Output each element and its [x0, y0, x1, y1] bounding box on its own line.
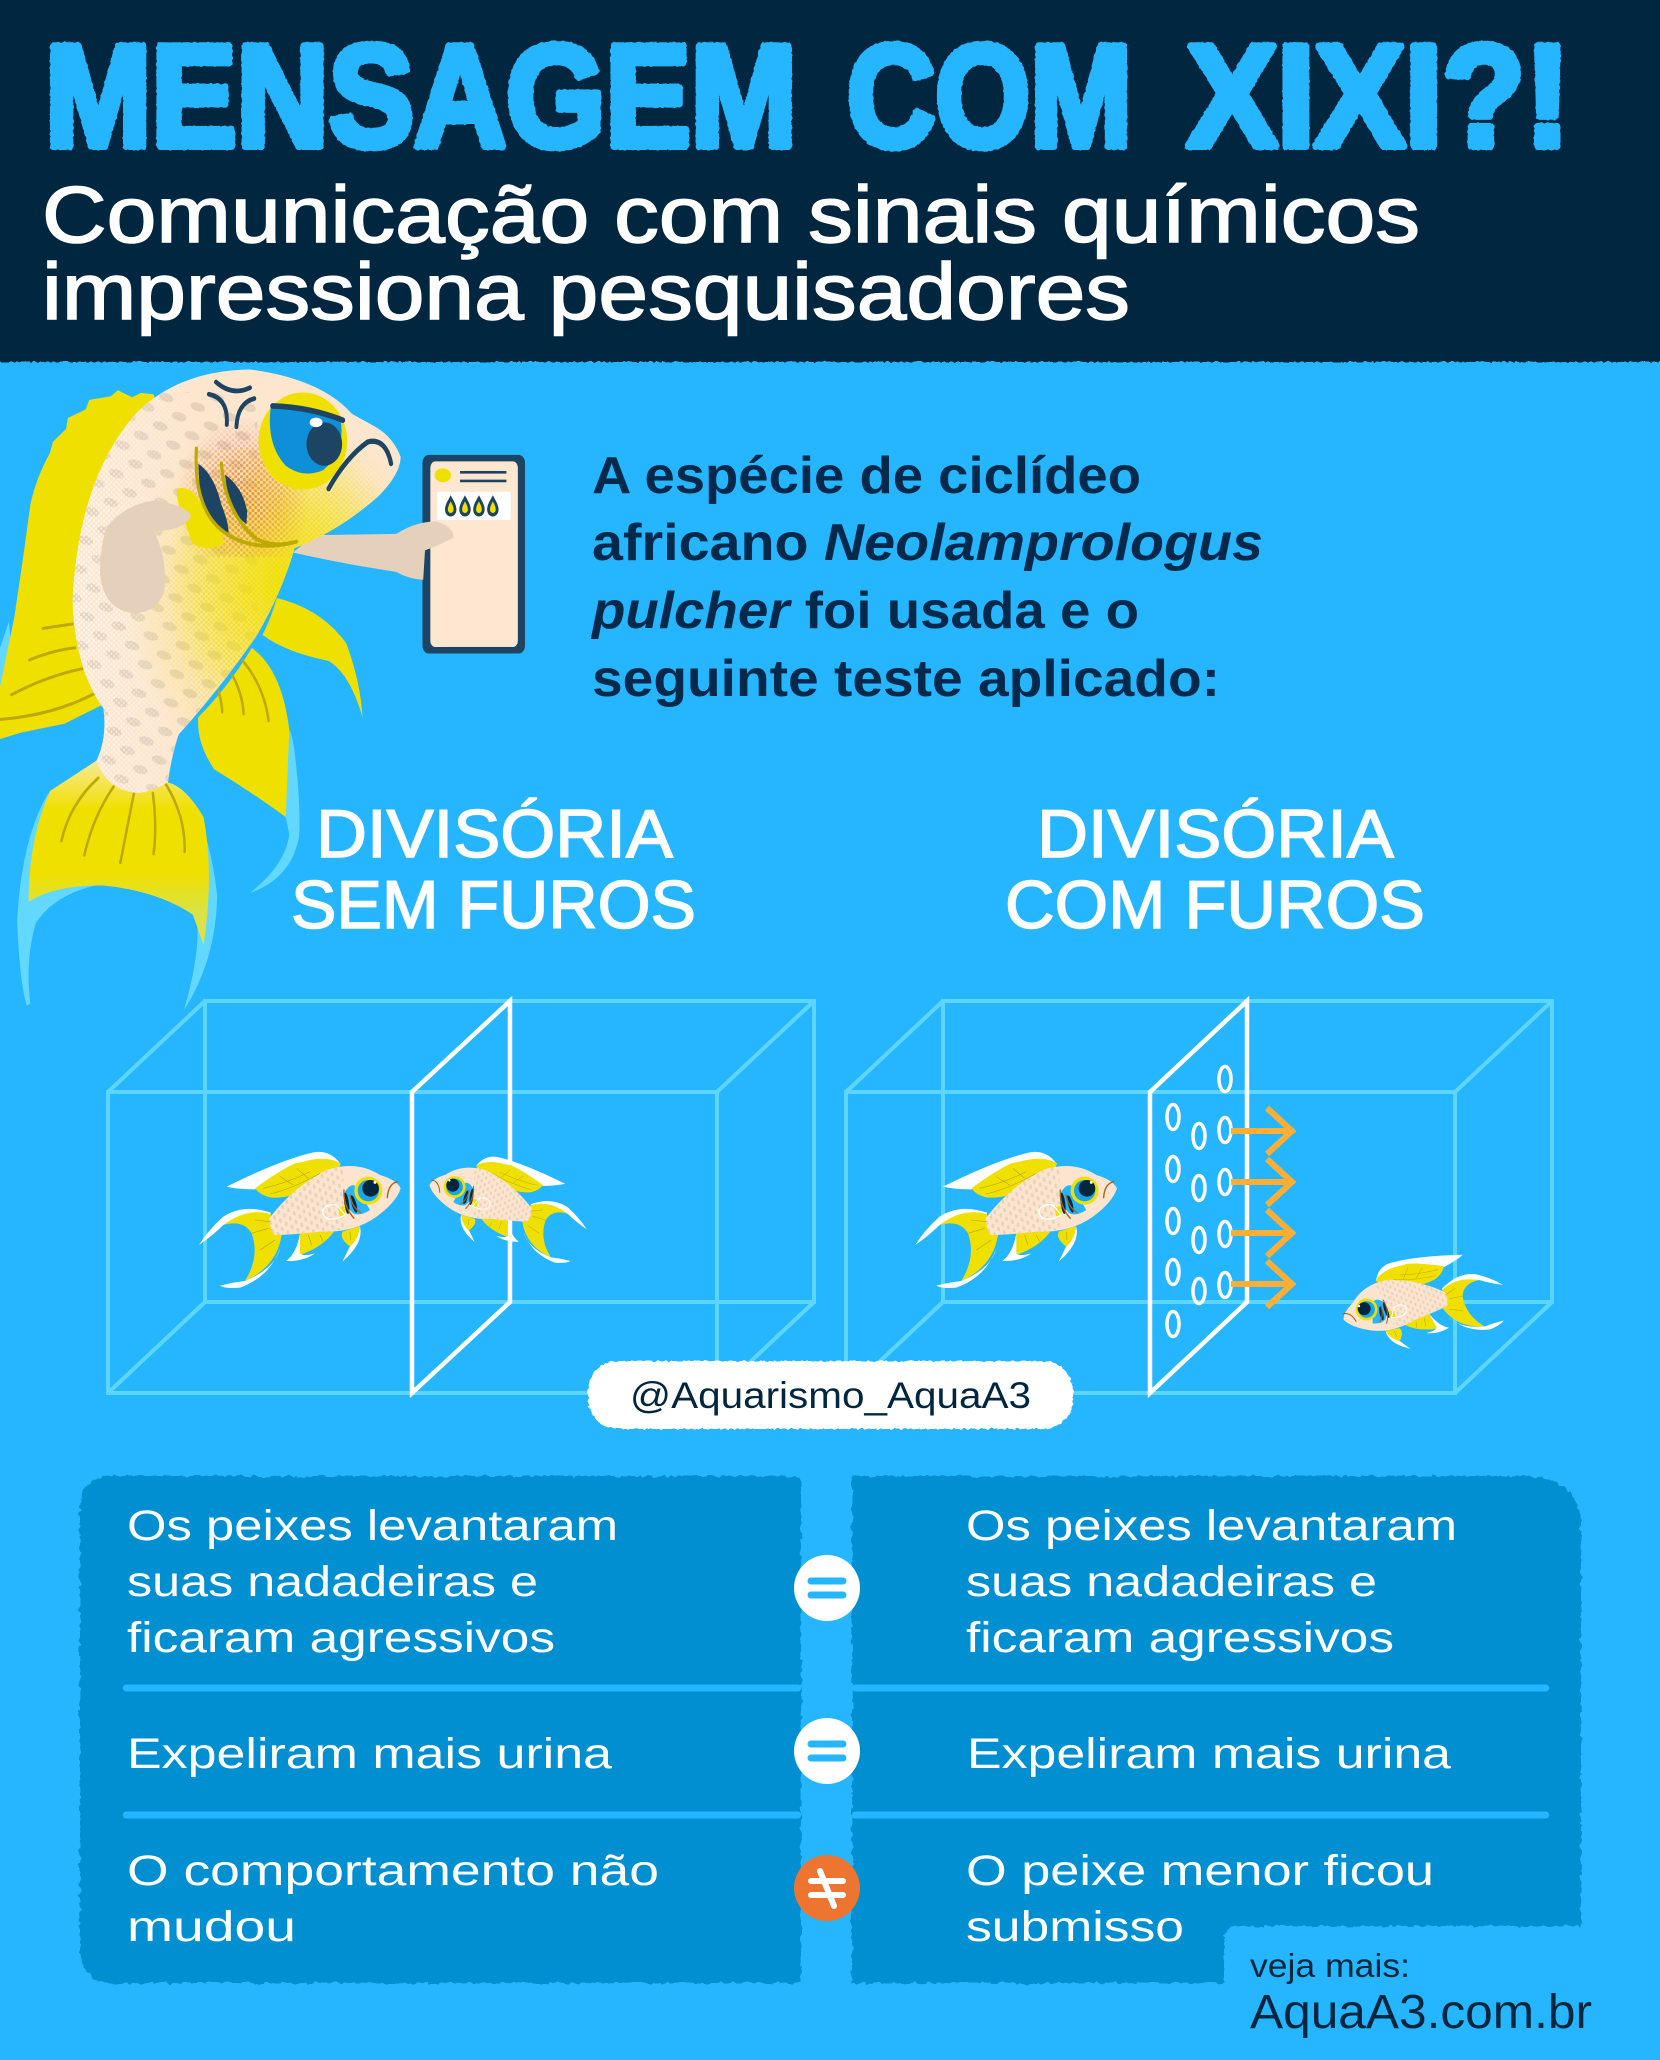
row texts: suas nadadeiras e: [127, 1558, 538, 1606]
row texts: submisso: [966, 1903, 1184, 1951]
comparison table: left column: [80, 1476, 801, 1983]
perforated divider: [1150, 1001, 1247, 1393]
row texts: suas nadadeiras e: [966, 1558, 1377, 1606]
illustration: big angry fish with phone: [0, 366, 525, 1010]
heading: divisória sem furos: [291, 796, 696, 943]
intro text: [590, 447, 1263, 708]
subtitle: impressiona pesquisadores: [42, 247, 1130, 336]
row texts: Expeliram mais urina: [127, 1730, 612, 1778]
row texts: Os peixes levantaram: [127, 1502, 618, 1550]
row texts: ficaram agressivos: [127, 1614, 555, 1662]
fish: body: [71, 366, 411, 800]
title: MENSAGEM: [45, 15, 797, 177]
header band: [0, 0, 1660, 362]
heading: divisória sem furos: DIVISÓRIA: [316, 796, 674, 872]
comparison table: right column: [852, 1476, 1581, 1983]
fish: angry eye: [259, 392, 347, 490]
footer link: [1250, 1947, 1592, 2039]
intro text: seguinte teste aplicado:: [592, 650, 1220, 708]
row texts: [127, 1502, 659, 1951]
row texts: O peixe menor ficou: [966, 1847, 1434, 1895]
row texts: ficaram agressivos: [966, 1614, 1394, 1662]
heading: divisória sem furos: SEM FUROS: [291, 867, 696, 943]
heading: divisória com furos: DIVISÓRIA: [1037, 796, 1395, 872]
row texts: Os peixes levantaram: [966, 1502, 1457, 1550]
intro text: A espécie de ciclídeo: [592, 447, 1141, 505]
intro text: pulcher foi usada e o: [590, 582, 1139, 640]
smaller fish: [429, 1157, 587, 1263]
tank outline: [846, 1001, 1552, 1393]
watermark pill: @Aquarismo_AquaA3: [630, 1375, 1031, 1416]
submissive small fish: [1330, 1221, 1519, 1388]
subtitle: Comunicação com sinais químicos: [42, 170, 1420, 259]
footer link: AquaA3.com.br: [1250, 1986, 1592, 2039]
fish: arm pointing at phone: [293, 521, 454, 580]
watermark pill: [588, 1361, 1073, 1429]
intro text: africano Neolamprologus: [592, 514, 1263, 572]
icon: anger mark: [209, 382, 254, 427]
row texts: mudou: [127, 1903, 296, 1951]
row texts: Expeliram mais urina: [967, 1730, 1451, 1778]
subtitle: [42, 170, 1420, 336]
fish: gills: [177, 448, 296, 548]
fish: lower fins: [198, 598, 362, 893]
diagram: tank with solid divider: [108, 1001, 814, 1393]
row texts: [966, 1502, 1457, 1951]
footer link: veja mais:: [1250, 1947, 1410, 1984]
solid divider: [412, 1001, 510, 1393]
icon: equal sign 1: [794, 1555, 860, 1621]
fish: frown: [329, 441, 391, 489]
fish: dorsal fin: [0, 390, 179, 739]
icon: phone: [422, 455, 525, 654]
heading: divisória com furos: [1005, 796, 1425, 943]
large fish: [199, 1152, 401, 1288]
diagram: tank with perforated divider: [846, 1001, 1552, 1393]
icon: equal sign 2: [794, 1718, 860, 1784]
fish: tail fin: [17, 761, 217, 1010]
row texts: O comportamento não: [127, 1847, 659, 1895]
title: COM: [847, 15, 1132, 177]
icon: not-equal sign: [794, 1855, 860, 1921]
heading: divisória com furos: COM FUROS: [1005, 867, 1425, 943]
title: [45, 15, 1570, 177]
arrows: chemical signal flow: [1231, 1108, 1292, 1307]
fish: pectoral fin: [100, 500, 191, 613]
large fish: [915, 1152, 1117, 1288]
title: XIXI?!: [1187, 15, 1570, 177]
tank outline: [108, 1001, 814, 1393]
